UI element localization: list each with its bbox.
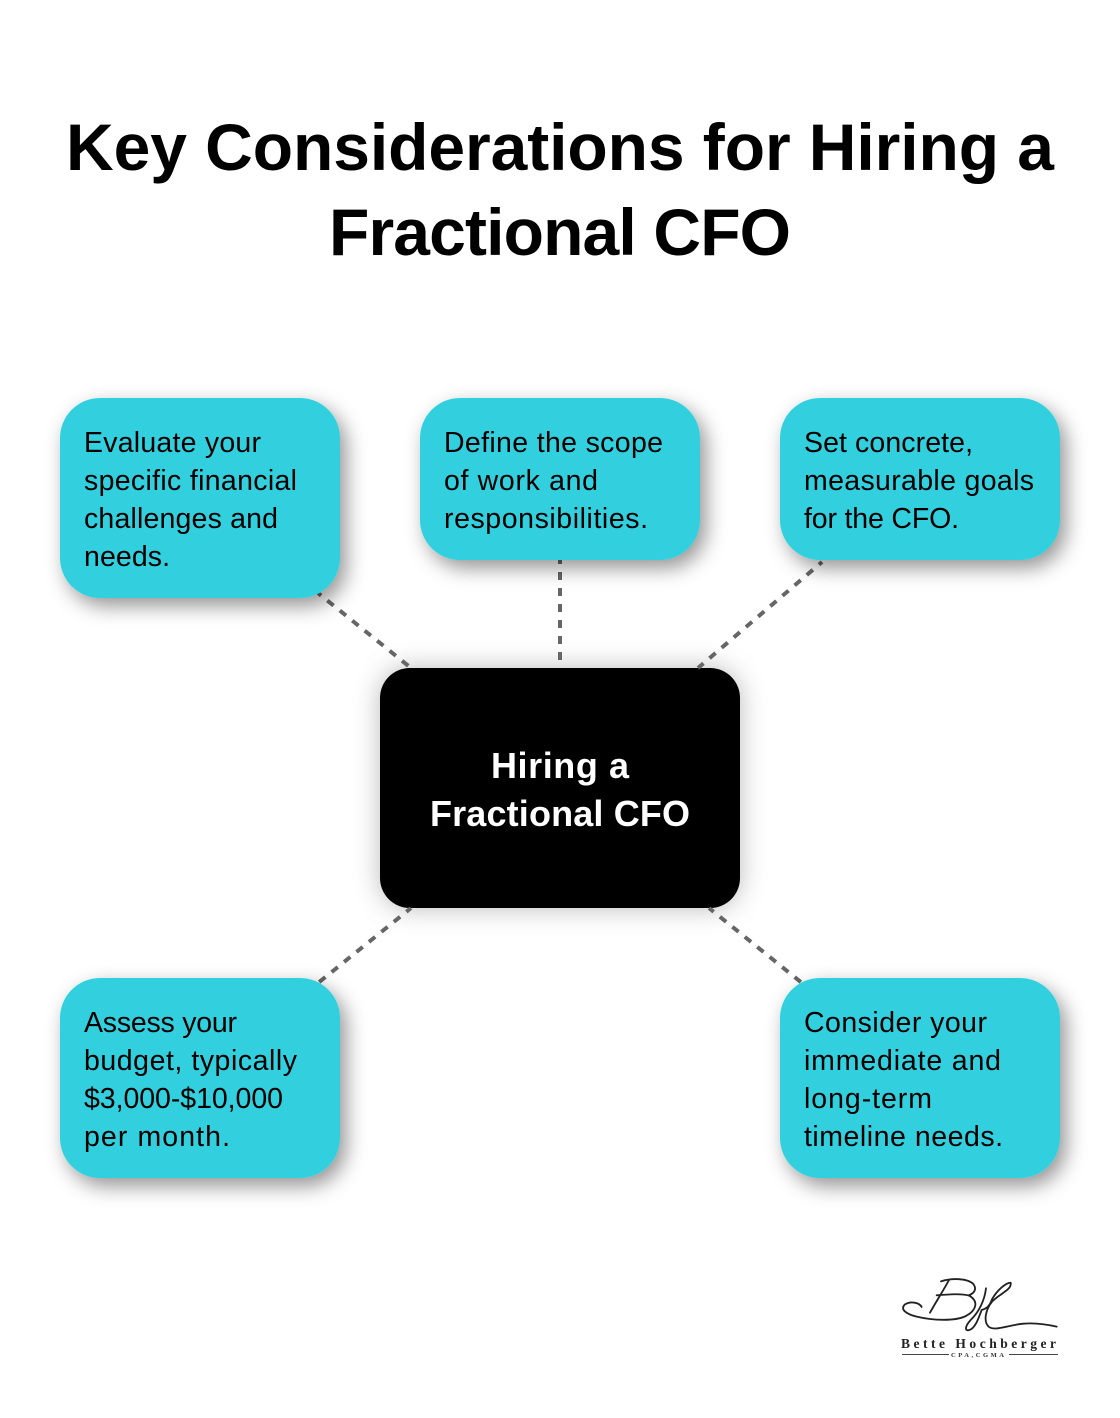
centre box [380, 668, 740, 908]
card: define scope: responsibilities. [444, 503, 648, 535]
card: assess budget: $3,000-$10,000 [84, 1083, 283, 1115]
card: set goals [780, 398, 1060, 560]
card: timeline: immediate and [804, 1045, 1001, 1077]
centre box: Hiring a [491, 745, 630, 786]
card: assess budget [60, 978, 340, 1178]
title [66, 110, 1055, 269]
logo: Bette Hochberger signature [901, 1279, 1058, 1359]
connector: timeline to centre [709, 908, 802, 983]
card: define scope: Define the scope [444, 427, 663, 459]
card: define scope: of work and [444, 465, 598, 497]
card: set goals: for the CFO. [804, 503, 959, 535]
card: timeline: long-term [804, 1083, 932, 1115]
card: assess budget: per month. [84, 1121, 230, 1153]
logo: Bette Hochberger signature: Bette Hochberger [901, 1336, 1056, 1351]
connector: budget to centre [318, 908, 411, 983]
centre box: Fractional CFO [430, 793, 690, 834]
card: set goals: measurable goals [804, 465, 1034, 497]
title: Fractional CFO [329, 195, 791, 269]
card: timeline [780, 978, 1060, 1178]
connector: scope to centre [558, 560, 562, 660]
logo: Bette Hochberger signature: CPA,CGMA [951, 1352, 1004, 1359]
card: set goals: Set concrete, [804, 427, 973, 459]
connector: goals to centre [698, 562, 822, 668]
card: timeline: timeline needs. [804, 1121, 1003, 1153]
connector: evaluate to centre [318, 593, 411, 668]
card: evaluate needs: Evaluate your [84, 427, 262, 459]
card: define scope [420, 398, 700, 560]
title: Key Considerations for Hiring a [66, 110, 1055, 184]
card: assess budget: Assess your [84, 1007, 238, 1039]
card: timeline: Consider your [804, 1007, 988, 1039]
card: assess budget: budget, typically [84, 1045, 298, 1077]
card: evaluate needs: needs. [84, 541, 170, 573]
card: evaluate needs: specific financial [84, 465, 297, 497]
card: evaluate needs [60, 398, 340, 598]
card: evaluate needs: challenges and [84, 503, 278, 535]
